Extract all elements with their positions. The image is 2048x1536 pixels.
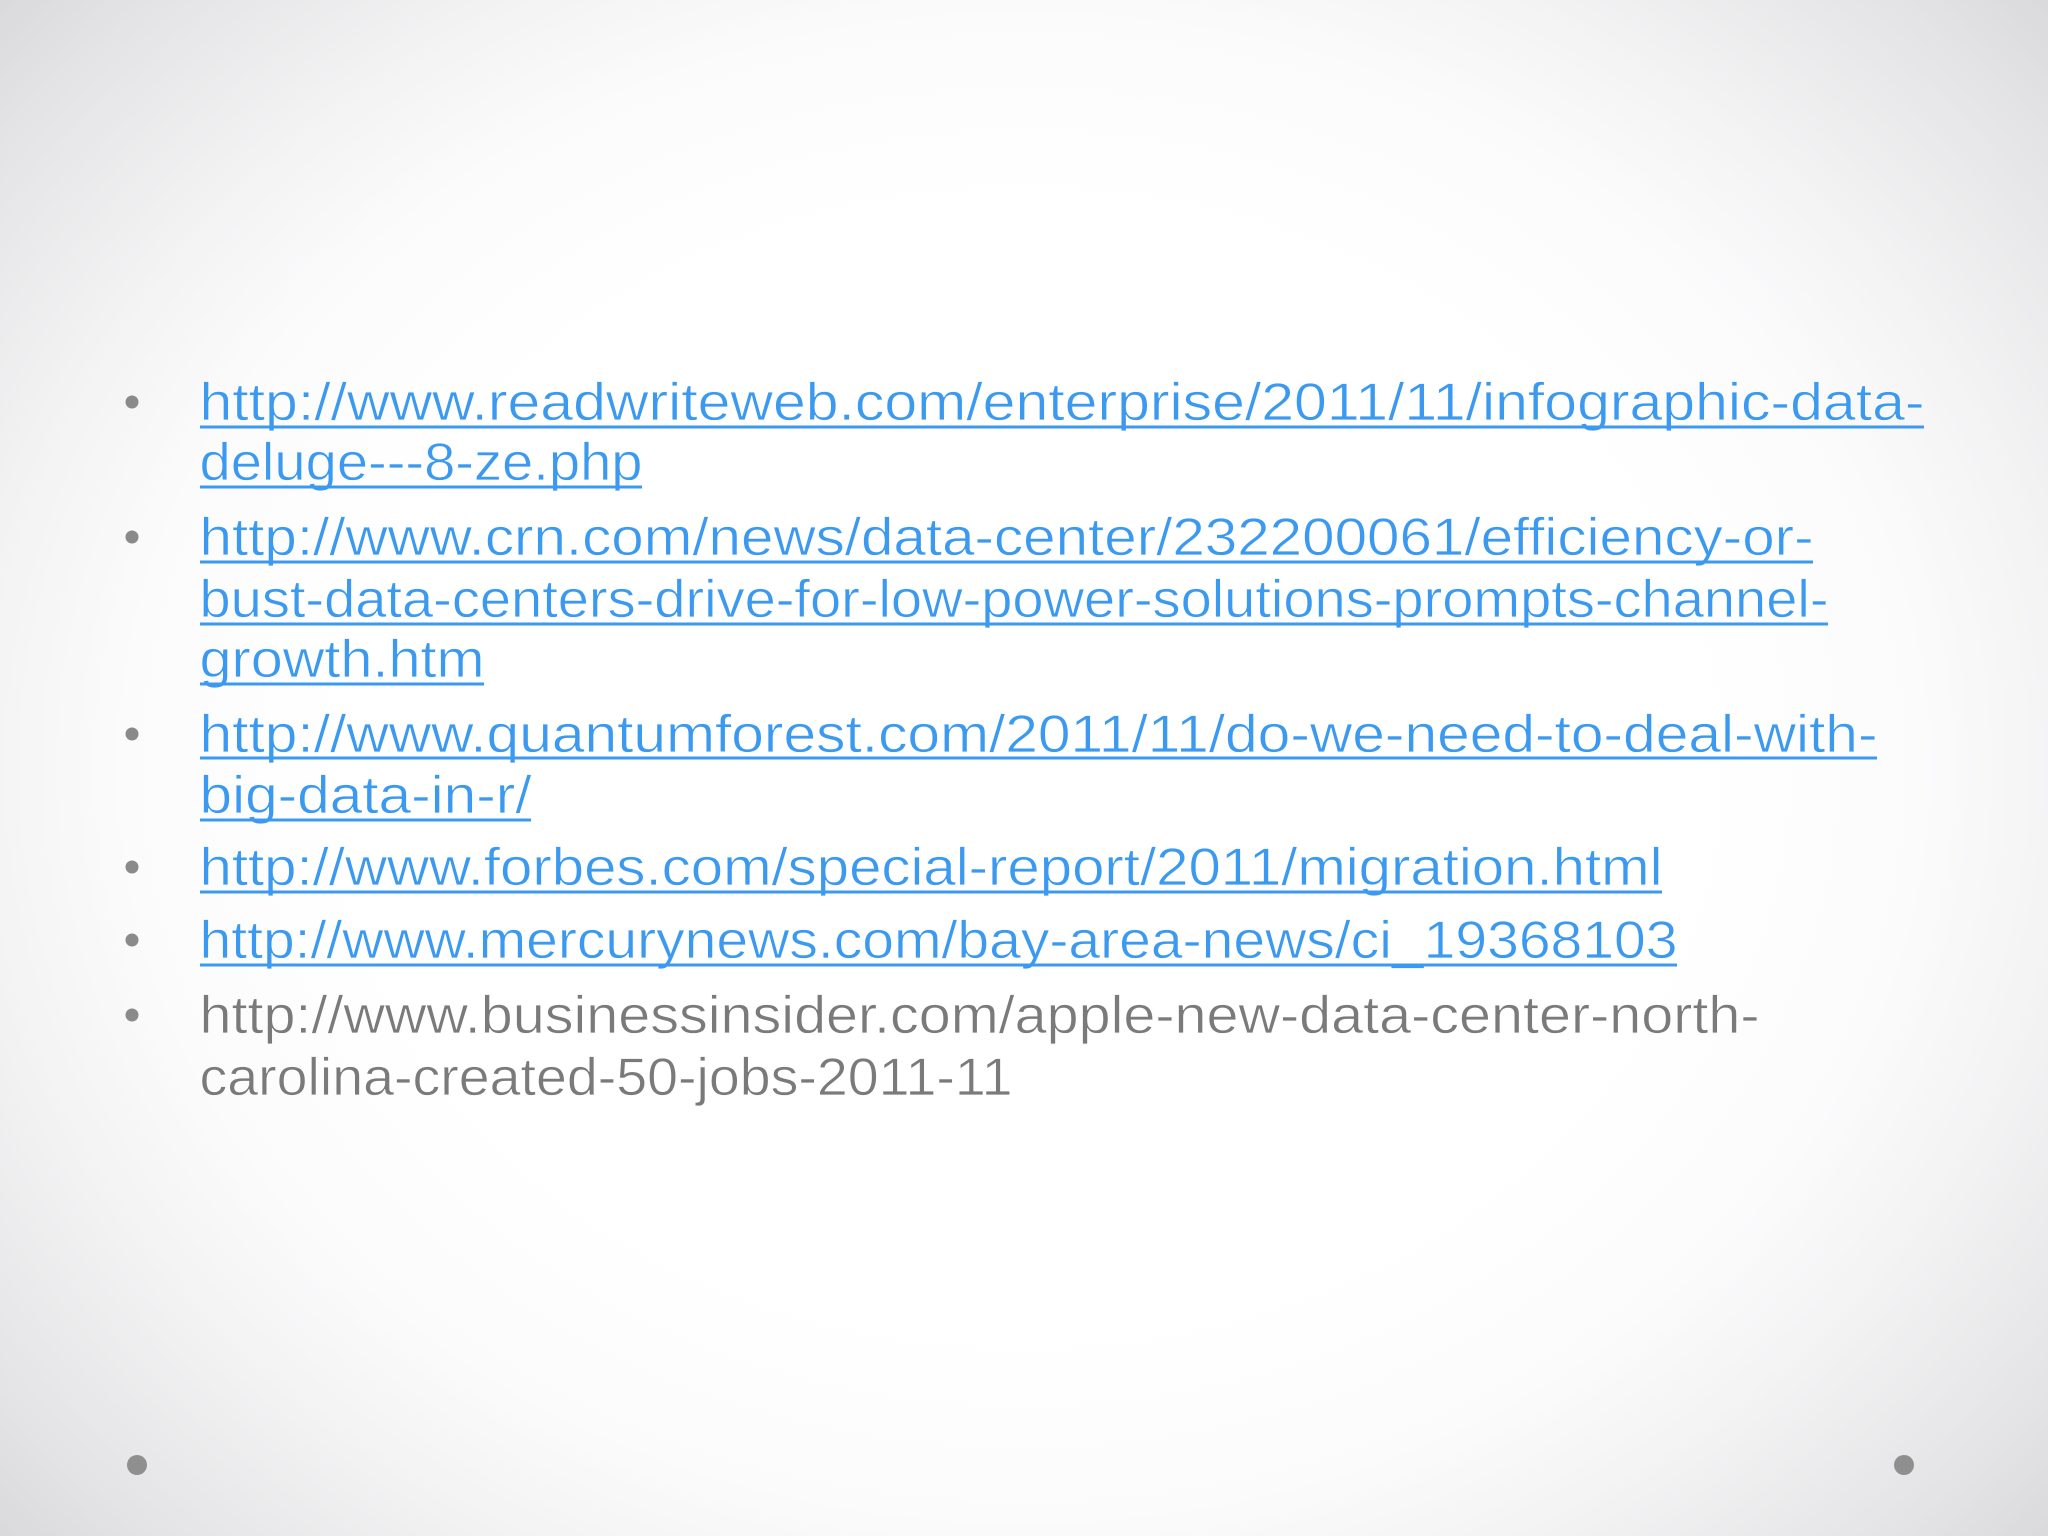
reference list xyxy=(126,373,1924,1107)
reference 6: businessinsider plain text: carolina-created-50-jobs-2011-11 xyxy=(200,1048,1012,1107)
reference 4: forbes link: http://www.forbes.com/special-report/2011/migration.html xyxy=(200,838,1662,897)
reference 3: quantumforest link: big-data-in-r/ xyxy=(200,766,532,825)
reference 3: quantumforest link: http://www.quantumforest.com/2011/11/do-we-need-to-deal-with- xyxy=(200,705,1878,764)
reference 5: mercurynews link: http://www.mercurynews.com/bay-area-news/ci_19368103 xyxy=(200,911,1678,970)
reference 1: readwriteweb link: http://www.readwriteweb.com/enterprise/2011/11/infographic-data- xyxy=(200,373,1924,432)
reference 1: readwriteweb link: deluge---8-ze.php xyxy=(200,433,642,492)
reference 1: readwriteweb link xyxy=(126,373,1924,492)
reference 6: businessinsider plain text xyxy=(126,986,1760,1107)
decorative dot: bottom right xyxy=(1894,1455,1914,1475)
reference 2: crn link xyxy=(126,508,1828,689)
reference 2: crn link: bust-data-centers-drive-for-low-power-solutions-prompts-channel- xyxy=(200,570,1828,629)
reference 2: crn link: growth.htm xyxy=(200,630,484,689)
reference 3: quantumforest link xyxy=(126,705,1878,825)
reference 6: businessinsider plain text: http://www.businessinsider.com/apple-new-data-center-north- xyxy=(200,986,1760,1045)
reference 2: crn link: http://www.crn.com/news/data-center/232200061/efficiency-or- xyxy=(200,508,1814,567)
decorative dot: bottom left xyxy=(127,1455,147,1475)
